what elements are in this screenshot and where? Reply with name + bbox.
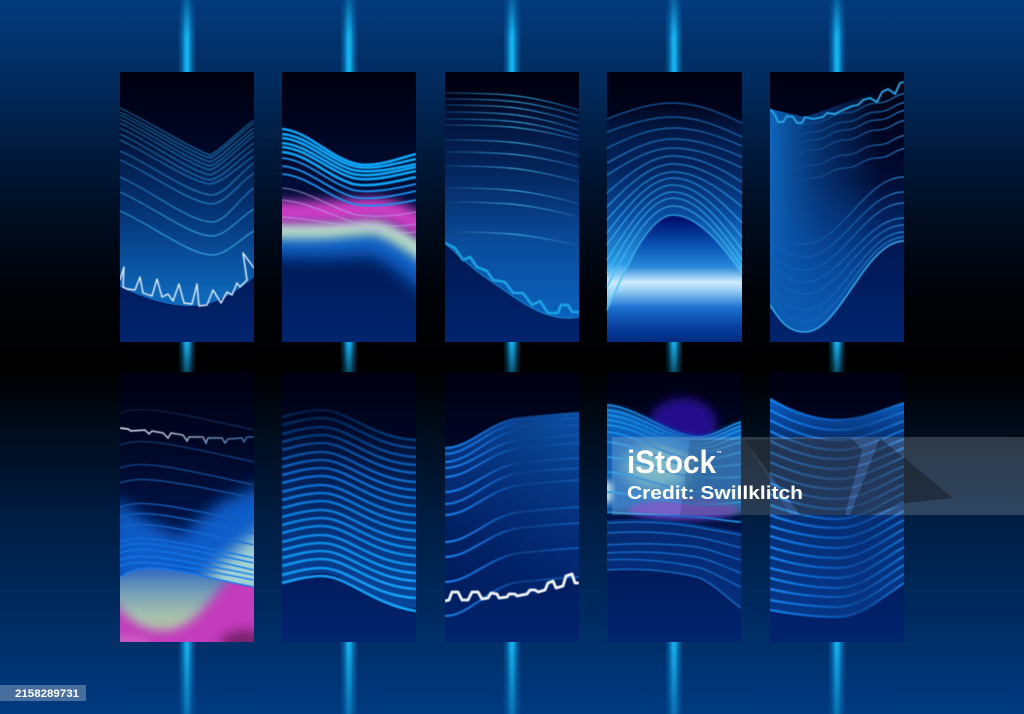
medium blue lines: [282, 158, 416, 206]
panel 5: wavy top edge and deep valley: [770, 72, 909, 342]
white glow at edge: [604, 480, 612, 504]
blue fill: [445, 413, 579, 590]
lower blue fill: [782, 193, 904, 332]
credit text: Credit: Swillklitch: [627, 482, 803, 503]
white notched line: [120, 428, 254, 443]
left blue fill: [770, 93, 874, 311]
pale teal glow: [195, 520, 254, 587]
panel 10: concave stripes: [770, 372, 904, 642]
stepped cyan line: [445, 243, 579, 313]
lower blue fill: [607, 519, 741, 608]
white spiky line: [120, 253, 254, 306]
watermark band with credit: [612, 437, 1024, 515]
pale lines over glow: [282, 188, 416, 233]
panel 2: cyan wave with pink glow band: [282, 72, 416, 342]
panel 6: faded lines over blue, teal and magenta glow: [120, 372, 254, 642]
teal glow: [623, 445, 691, 489]
glow bars: top row: [178, 0, 846, 72]
glow bars: middle row: [178, 342, 846, 372]
faded line set: [120, 410, 254, 587]
blue fill between waves: [282, 410, 416, 608]
concave lines: [770, 399, 904, 617]
glow band: [282, 191, 416, 299]
rising lines: [445, 413, 579, 616]
watermark logo shapes: [680, 438, 953, 515]
lower line set: [607, 522, 741, 608]
upper line set: [607, 405, 741, 522]
white stepped line: [445, 574, 579, 601]
upper wavy lines: [802, 92, 904, 180]
translucent band: [612, 437, 1024, 515]
magenta and beige lower area: [120, 568, 254, 642]
violet lower glow: [628, 500, 738, 520]
iStock logo text: iStock: [627, 444, 716, 480]
blue glow: [120, 476, 254, 578]
violet glow: [649, 398, 717, 450]
arch gradient: [607, 215, 742, 342]
trademark mark: ™: [716, 450, 722, 457]
blue band: [597, 405, 751, 512]
panel 9: lines with violet and teal glow: [607, 372, 741, 642]
arched lines: [607, 103, 742, 310]
glow bars: bottom row: [178, 642, 846, 714]
blue fill: [445, 93, 579, 318]
blue fill under lines: [607, 103, 742, 312]
panel 7: evenly spaced thick waves: [282, 372, 416, 642]
bright cyan lines: [282, 129, 416, 185]
valley lines: [794, 176, 904, 321]
panel 1: V-shaped lines with white spiky line: [120, 72, 254, 342]
thick wave lines: [282, 410, 416, 611]
image id tag: [0, 685, 86, 701]
flat lines: [445, 93, 579, 246]
panel 4: arch of lines with bright horizon: [607, 72, 742, 342]
wavy cyan top line: [770, 82, 904, 123]
panel 8: rising lines with white stepped line: [445, 372, 579, 642]
image id number: 2158289731: [15, 688, 79, 700]
blue fill under lines: [120, 108, 254, 306]
blue fill: [770, 399, 904, 617]
curved line set: [120, 108, 254, 255]
panel 3: descending lines with stepped edge: [445, 72, 579, 342]
main valley line: [770, 241, 904, 332]
lower edge: [445, 243, 579, 318]
